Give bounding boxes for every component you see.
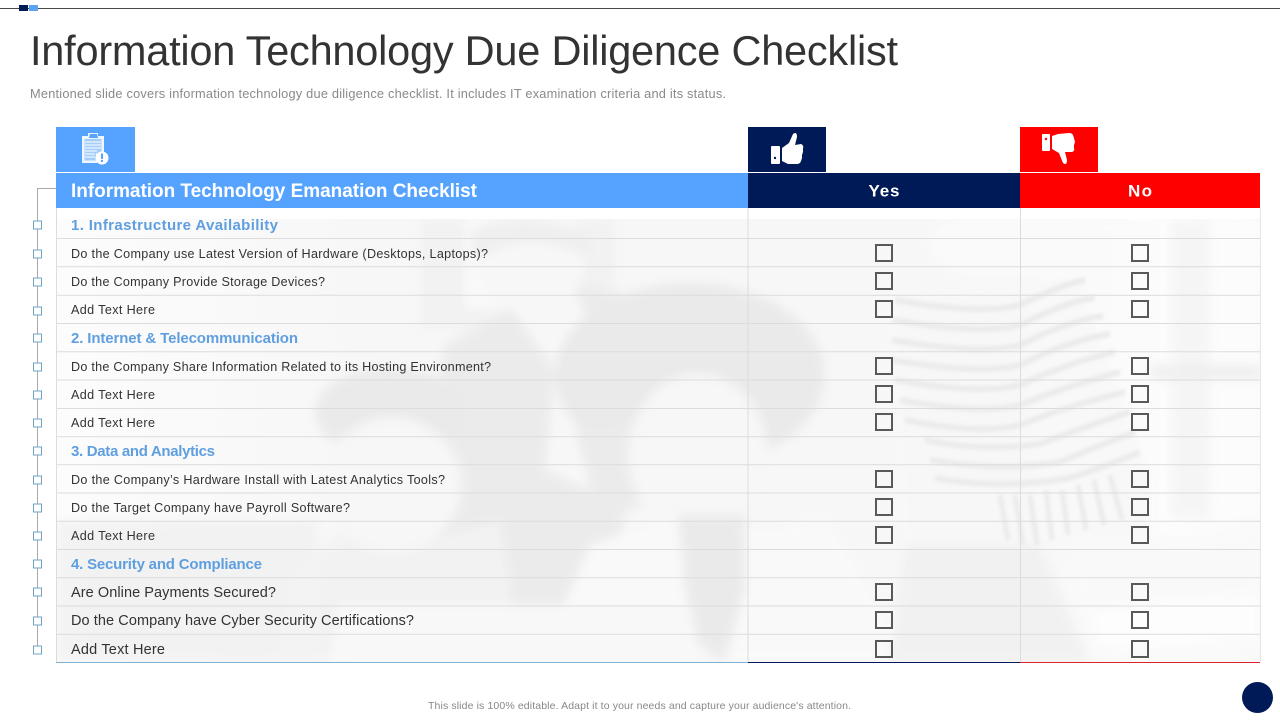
section 1: infrastructure availability: Do the Company use Latest Version of Hardware (Desktops, Laptops)? [71,247,488,261]
background photo: team around a laptop [57,210,1260,662]
icon: thumbs down on red tab [1020,127,1098,172]
subtitle: Mentioned slide covers information technology due diligence checklist. It includes IT examination criteria and its status. [30,86,726,101]
title: Information Technology Due Diligence Checklist [30,27,898,74]
section 1: infrastructure availability: Do the Company Provide Storage Devices? [71,275,325,289]
section 4: security and compliance [71,556,414,658]
section 1: infrastructure availability: Add Text Here [71,303,155,317]
icon: thumbs up on navy tab [748,127,826,172]
top rule with squares [0,5,1280,11]
section 3: data and analytics: Do the Target Company have Payroll Software? [71,501,350,515]
table header row: Yes [868,182,900,200]
yes column checkboxes [876,245,892,657]
left connector with row markers [34,188,56,654]
section 4: security and compliance: Do the Company have Cyber Security Certifications? [71,613,414,629]
icon: clipboard on blue tab [56,127,135,172]
table header row: Information Technology Emanation Checklist [71,181,478,202]
table grid lines [56,208,1260,663]
page number circle [1242,682,1273,713]
section 3: data and analytics: Do the Company’s Hardware Install with Latest Analytics Tools? [71,473,445,487]
section 4: security and compliance: Are Online Payments Secured? [71,585,276,601]
footer note: This slide is 100% editable. Adapt it to your needs and capture your audience's attention. [428,700,851,712]
section 3: data and analytics: 3. Data and Analytics [71,443,215,460]
section 3: data and analytics [71,443,445,543]
section 2: internet and telecommunication: 2. Internet & Telecommunication [71,330,298,347]
section 2: internet and telecommunication: Add Text Here [71,416,155,430]
section 1: infrastructure availability: 1. Infrastructure Availability [71,217,279,234]
table header row [56,173,1260,208]
section 2: internet and telecommunication [71,330,491,430]
section 3: data and analytics: Add Text Here [71,529,155,543]
section 4: security and compliance: 4. Security and Compliance [71,556,262,573]
no column checkboxes [1132,245,1148,657]
section 1: infrastructure availability [71,217,488,317]
section 4: security and compliance: Add Text Here [71,642,165,658]
section 2: internet and telecommunication: Do the Company Share Information Related to its Hosting Environment? [71,360,491,374]
table header row: No [1128,182,1152,200]
section 2: internet and telecommunication: Add Text Here [71,388,155,402]
